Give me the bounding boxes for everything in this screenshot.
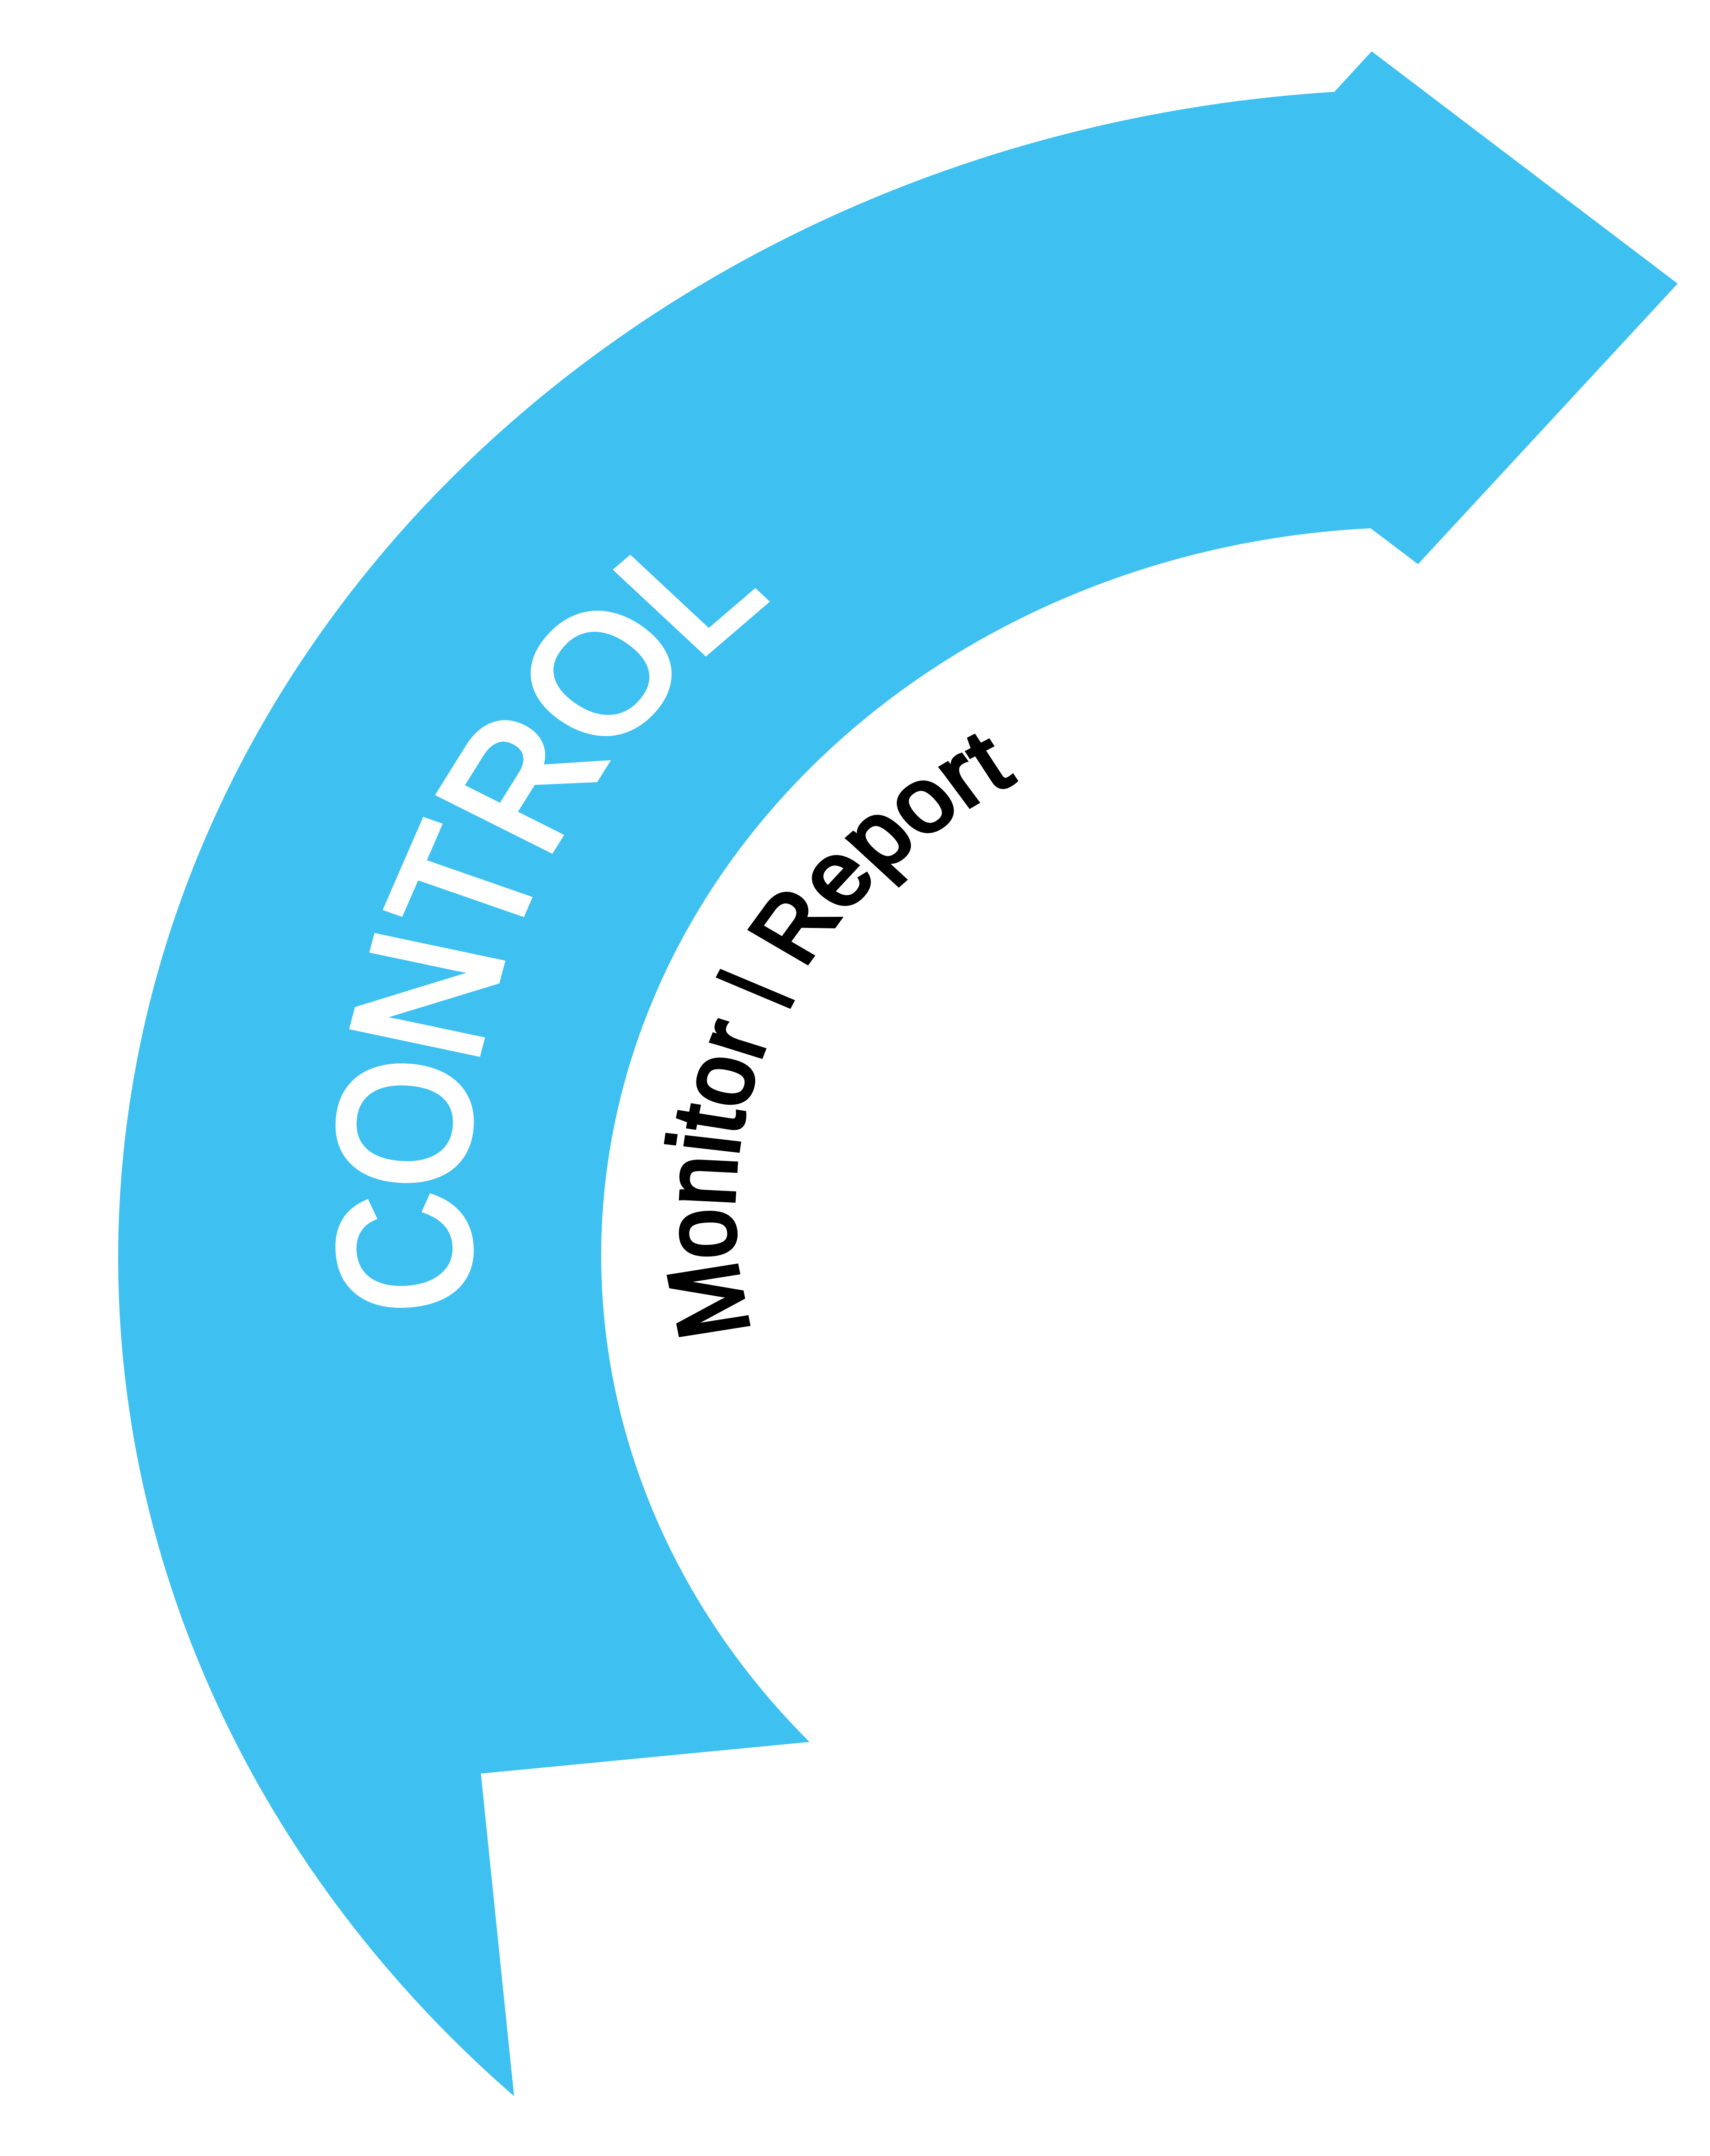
- label: Monitor | Report: |: [702, 959, 796, 1013]
- heading: CONTROL: CONTROL: [296, 492, 794, 1320]
- label: Monitor | Report: Report: [711, 711, 1028, 1001]
- label: Monitor | Report: Monitor: [643, 1007, 790, 1346]
